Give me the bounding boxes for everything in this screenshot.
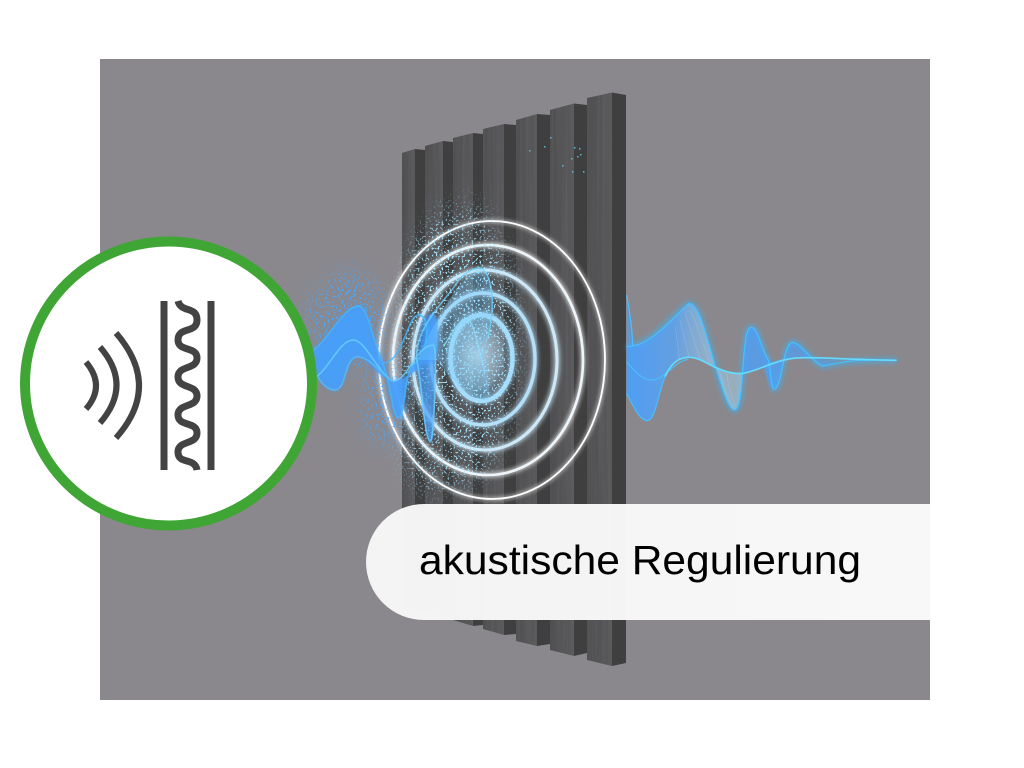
icon: wavy absorber layer [178, 301, 197, 470]
glowing wave core [444, 307, 512, 403]
hatch lines [675, 310, 735, 407]
particle cloud around the rings [386, 188, 531, 504]
ring 1 outer [379, 221, 605, 499]
concentric sound rings [379, 221, 605, 499]
icon: sound waves hitting absorber [86, 301, 211, 470]
lobe 5 [783, 342, 812, 359]
right sound wave after the wall [627, 295, 897, 421]
lobe 4 [763, 359, 783, 389]
wave ribbon fill [313, 306, 438, 442]
stray particles at wall top [529, 137, 584, 172]
slatted acoustic wall panel [400, 90, 626, 670]
ring 4 [431, 293, 535, 425]
small spike at wall edge [627, 295, 633, 347]
wave glow [627, 303, 897, 410]
lobe 1 [627, 303, 715, 421]
left sound wave entering the wall [313, 268, 492, 442]
ring 3 [413, 270, 557, 450]
particle cloud left of the wall [291, 258, 422, 458]
label text: akustische Regulierung [419, 537, 861, 583]
wave soft glow [313, 306, 438, 417]
ring 2 [393, 245, 583, 475]
ring 5 inner [450, 315, 512, 401]
glow behind the rings [379, 221, 605, 499]
lobe 2 [715, 366, 743, 410]
background panel [100, 59, 930, 700]
icon: sound arcs [86, 333, 139, 438]
lobe 6 tail [812, 358, 840, 366]
icon badge: green circle [25, 242, 312, 526]
lobe 3 [743, 327, 773, 373]
wave inner ribbons over rings [417, 268, 492, 400]
wave edge lines [627, 295, 873, 421]
icon: absorber walls [164, 301, 211, 470]
label pill background [366, 504, 930, 620]
